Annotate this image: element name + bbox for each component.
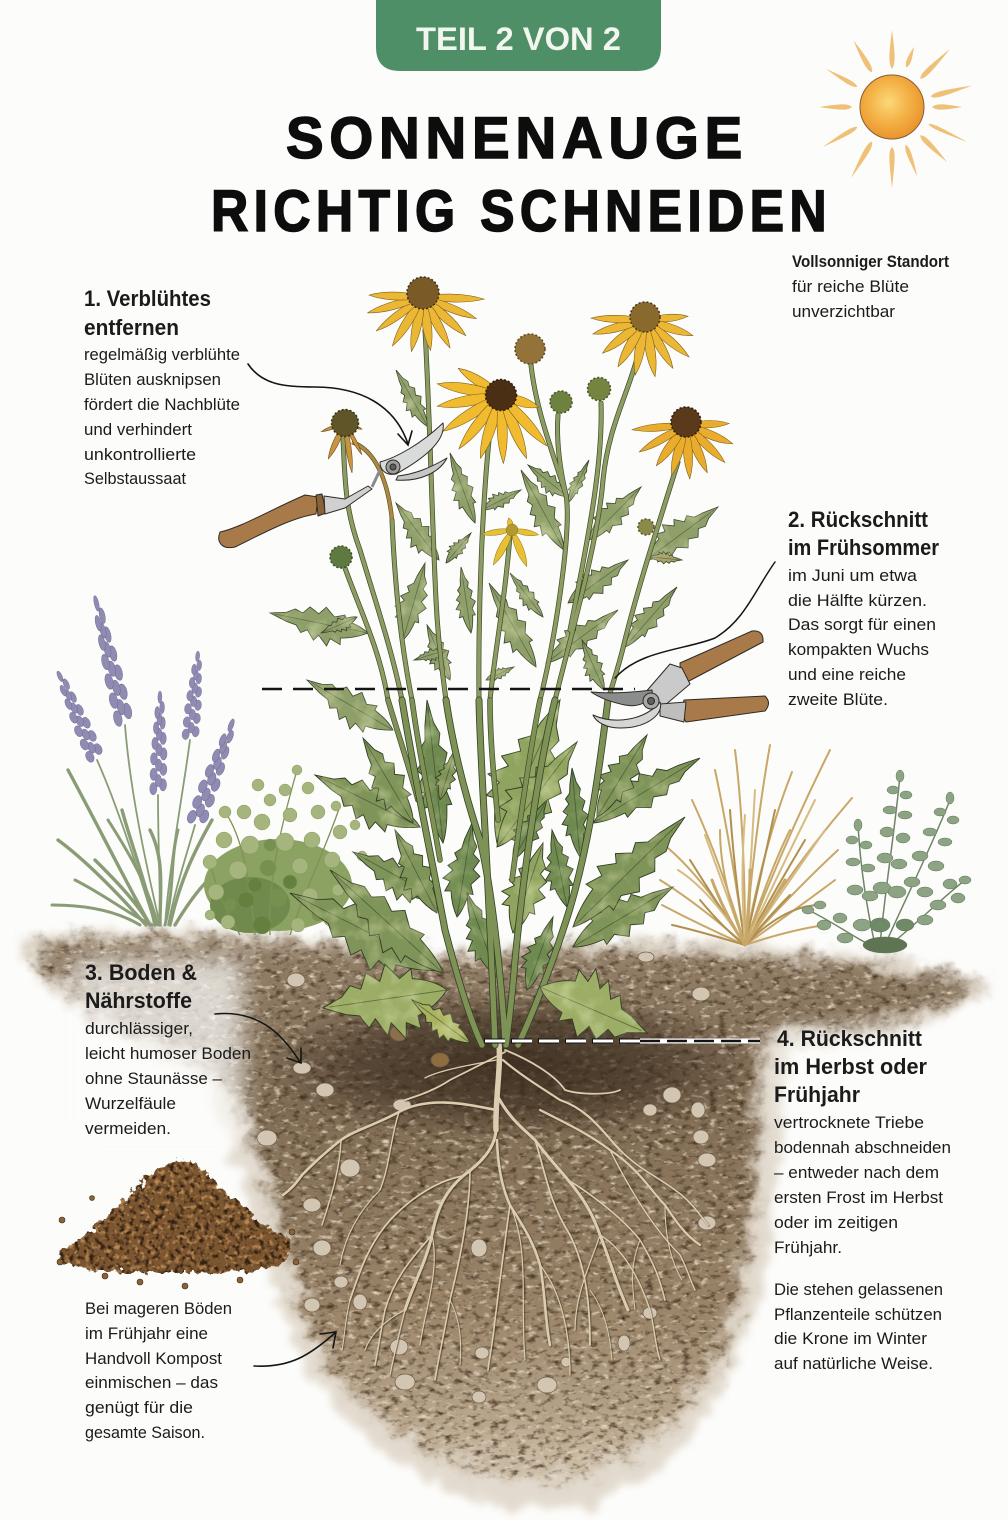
pale wash behind label 4	[782, 1032, 972, 1122]
text: sun location note: Vollsonniger Standort	[792, 252, 949, 271]
text block: step 4: 4. Rückschnitt	[777, 1026, 922, 1051]
text block: step 3: Wurzelfäule	[85, 1094, 176, 1113]
icon: sun	[819, 30, 973, 188]
text block: step 4: auf natürliche Weise.	[774, 1354, 933, 1373]
text block: compost note: genügt für die	[85, 1398, 193, 1417]
side plant: ornamental grass	[660, 745, 852, 945]
text block: step 4: vertrocknete Triebe	[774, 1113, 924, 1132]
text block: step 1: 1. Verblühtes	[84, 286, 211, 311]
text block: step 1: unkontrollierte	[84, 445, 196, 464]
foliage: lower leaves	[275, 685, 709, 999]
text block: step 2: im Juni um etwa	[788, 566, 918, 585]
text block: step 4: Die stehen gelassenen	[774, 1280, 943, 1299]
foreground basal leaves	[318, 951, 662, 1062]
text block: step 2: Das sorgt für einen	[788, 615, 936, 634]
stems	[343, 330, 678, 1045]
flower: top left	[367, 277, 484, 353]
text block: step 4: – entweder nach dem	[774, 1163, 939, 1182]
text block: step 4: die Krone im Winter	[774, 1329, 927, 1348]
text block: step 4: im Herbst oder	[774, 1054, 927, 1079]
text block: step 2: 2. Rückschnitt	[788, 507, 928, 532]
text block: compost note: im Frühjahr eine	[85, 1324, 208, 1343]
flower buds	[330, 334, 654, 568]
text block: step 4: bodennah abschneiden	[774, 1138, 951, 1157]
tool: large secateurs at cut line	[591, 631, 768, 728]
title	[211, 106, 832, 244]
text block: step 2: zweite Blüte.	[788, 690, 888, 709]
flower: centre	[436, 364, 551, 464]
compost pile	[57, 1158, 299, 1289]
flower: wilted seed head	[321, 410, 364, 473]
flower: small yellow	[481, 517, 539, 568]
text block: step 2: und eine reiche	[788, 665, 906, 684]
text block: compost note	[85, 1299, 232, 1442]
text block: step 1: Selbstaussaat	[84, 469, 186, 488]
text block: step 3	[85, 960, 251, 1138]
text block: step 4: Frühjahr	[774, 1082, 860, 1107]
flower: top right	[591, 302, 694, 378]
text block: compost note: Bei mageren Böden	[85, 1299, 232, 1318]
stones in the soil	[257, 952, 716, 1403]
side plant: green herb bush	[203, 765, 367, 935]
text block: compost note: Handvoll Kompost	[85, 1349, 222, 1368]
text block: step 2	[788, 507, 939, 709]
foliage: upper leaves	[266, 366, 727, 748]
text block: step 3: ohne Staunässe –	[85, 1069, 223, 1088]
text block: step 3: 3. Boden &	[85, 960, 197, 985]
arrow: step 1 to secateurs	[248, 364, 412, 445]
side plant: grey-green shrub	[802, 770, 971, 953]
pale wash behind label 3	[72, 958, 244, 1148]
badge: Teil 2 von 2: TEIL 2 VON 2	[416, 21, 621, 57]
text: sun location note	[792, 252, 949, 321]
cut line: early summer	[262, 688, 635, 690]
arrow: step 2 to cut line	[615, 562, 775, 678]
text block: step 3: leicht humoser Boden	[85, 1044, 251, 1063]
text block: step 4: Pflanzenteile schützen	[774, 1305, 942, 1324]
text: sun location note: unverzichtbar	[792, 302, 895, 321]
text block: step 3: durchlässiger,	[85, 1019, 193, 1038]
text block: compost note: gesamte Saison.	[85, 1423, 205, 1442]
text block: step 1	[84, 286, 240, 488]
soil cross-section	[18, 932, 992, 1510]
text block: step 1: entfernen	[84, 315, 179, 340]
text block: step 1: Blüten ausknipsen	[84, 370, 221, 389]
text block: step 4	[774, 1026, 951, 1373]
text block: step 4: ersten Frost im Herbst	[774, 1188, 943, 1207]
text block: compost note: einmischen – das	[85, 1373, 218, 1392]
text block: step 4: Frühjahr.	[774, 1238, 842, 1257]
plant: Sonnenauge	[266, 277, 734, 1062]
tool: small secateurs on wilted stem	[219, 423, 447, 548]
badge: Teil 2 von 2	[376, 0, 661, 71]
text block: step 1: regelmäßig verblühte	[84, 345, 240, 364]
title: RICHTIG SCHNEIDEN	[211, 179, 832, 244]
text block: step 2: die Hälfte kürzen.	[788, 591, 927, 610]
text: sun location note: für reiche Blüte	[792, 277, 909, 296]
text block: step 3: vermeiden.	[85, 1119, 171, 1138]
text block: step 3: Nährstoffe	[85, 988, 192, 1013]
flower: right	[632, 407, 734, 479]
arrow: step 3 to soil	[215, 1013, 301, 1063]
text block: step 4: oder im zeitigen	[774, 1213, 898, 1232]
title: SONNENAUGE	[286, 106, 748, 171]
side plant: lavender	[49, 594, 243, 925]
text block: step 1: und verhindert	[84, 420, 192, 439]
text block: step 2: kompakten Wuchs	[788, 640, 929, 659]
roots	[283, 1043, 708, 1380]
cut line: autumn at ground level	[484, 1038, 760, 1044]
arrow: compost to soil	[254, 1332, 336, 1366]
text block: step 1: fördert die Nachblüte	[84, 395, 240, 414]
text block: step 2: im Frühsommer	[788, 535, 939, 560]
